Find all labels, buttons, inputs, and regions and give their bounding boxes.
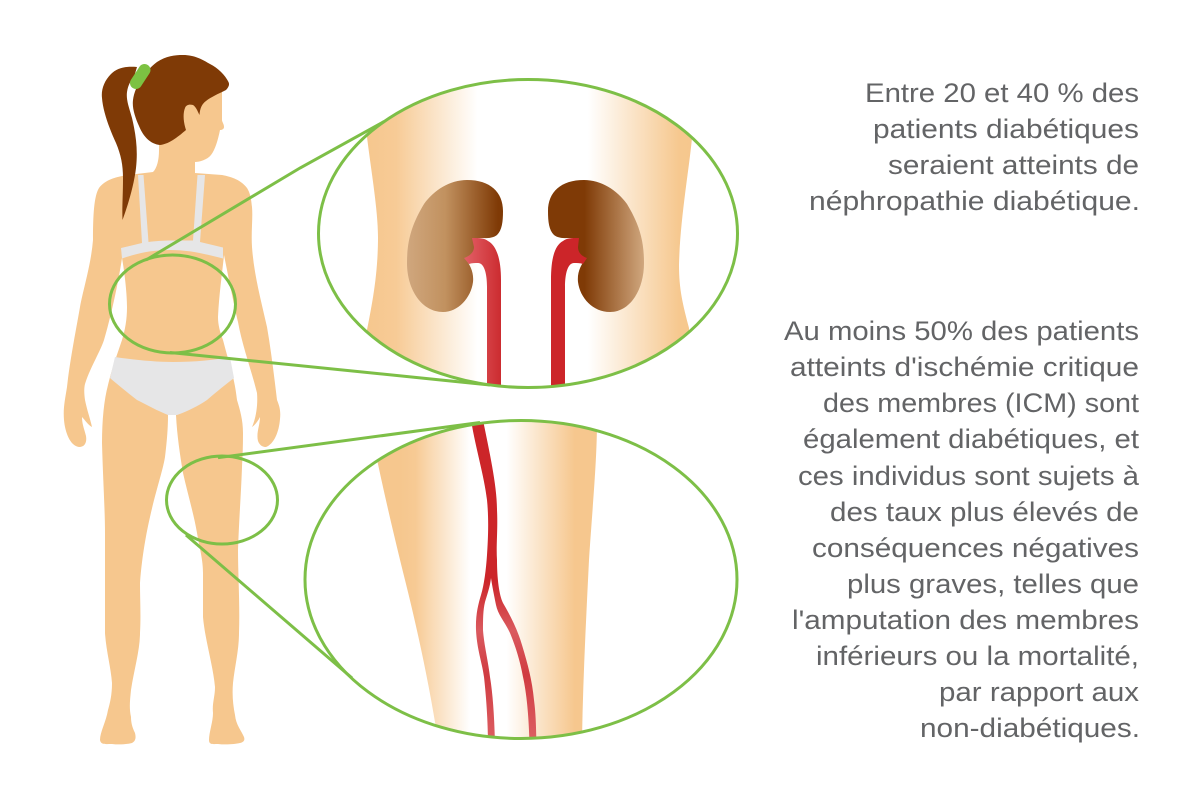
callout circle: thigh on figure [166, 456, 278, 544]
text block: nephropathy statistic: Entre 20 et 40 % des [865, 78, 1139, 108]
text block: critical limb ischemia statistic: également diabétiques, et [803, 424, 1140, 454]
text block: critical limb ischemia statistic: atteints d'ischémie critique [790, 352, 1139, 382]
text block: critical limb ischemia statistic: plus graves, telles que [847, 569, 1139, 599]
left kidney [407, 180, 503, 312]
connector lines: thigh zoom [186, 422, 480, 678]
hair band [136, 70, 144, 83]
hair [133, 55, 229, 145]
text block: critical limb ischemia statistic: ces individus sont sujets à [798, 461, 1140, 491]
connector lines: kidney zoom [146, 122, 490, 385]
text block: critical limb ischemia statistic: des membres (ICM) sont [823, 388, 1140, 418]
text block: critical limb ischemia statistic: l'amputation des membres [792, 605, 1139, 635]
ear [183, 105, 201, 130]
thigh zoom outline [305, 420, 737, 738]
kidney zoom outline [318, 80, 738, 388]
underwear [110, 357, 234, 415]
left renal vessel [464, 238, 501, 395]
ponytail [102, 67, 137, 220]
torso section [367, 87, 692, 380]
panel: thigh artery zoom [305, 420, 737, 745]
text block: critical limb ischemia statistic: des taux plus élevés de [830, 497, 1139, 527]
text block: nephropathy statistic [809, 78, 1140, 216]
right renal vessel [551, 238, 587, 395]
right kidney [548, 180, 644, 312]
text block: nephropathy statistic: néphropathie diabétique. [809, 186, 1140, 216]
text block: nephropathy statistic: patients diabétiques [873, 114, 1139, 144]
text block: critical limb ischemia statistic [784, 316, 1140, 743]
body silhouette [64, 92, 280, 744]
artery [471, 420, 536, 745]
text block: critical limb ischemia statistic: conséquences négatives [812, 533, 1139, 563]
text block: critical limb ischemia statistic: Au moins 50% des patients [784, 316, 1139, 346]
callout circle: torso on figure [110, 255, 236, 353]
thigh section [373, 420, 597, 740]
text block: critical limb ischemia statistic: inférieurs ou la mortalité, [816, 641, 1139, 671]
bra [121, 175, 223, 258]
text block: critical limb ischemia statistic: par rapport aux [939, 677, 1140, 707]
figure: woman seen from behind [64, 55, 280, 744]
text block: nephropathy statistic: seraient atteints de [888, 150, 1139, 180]
panel: kidneys zoom [318, 70, 738, 400]
text block: critical limb ischemia statistic: non-diabétiques. [920, 713, 1140, 743]
